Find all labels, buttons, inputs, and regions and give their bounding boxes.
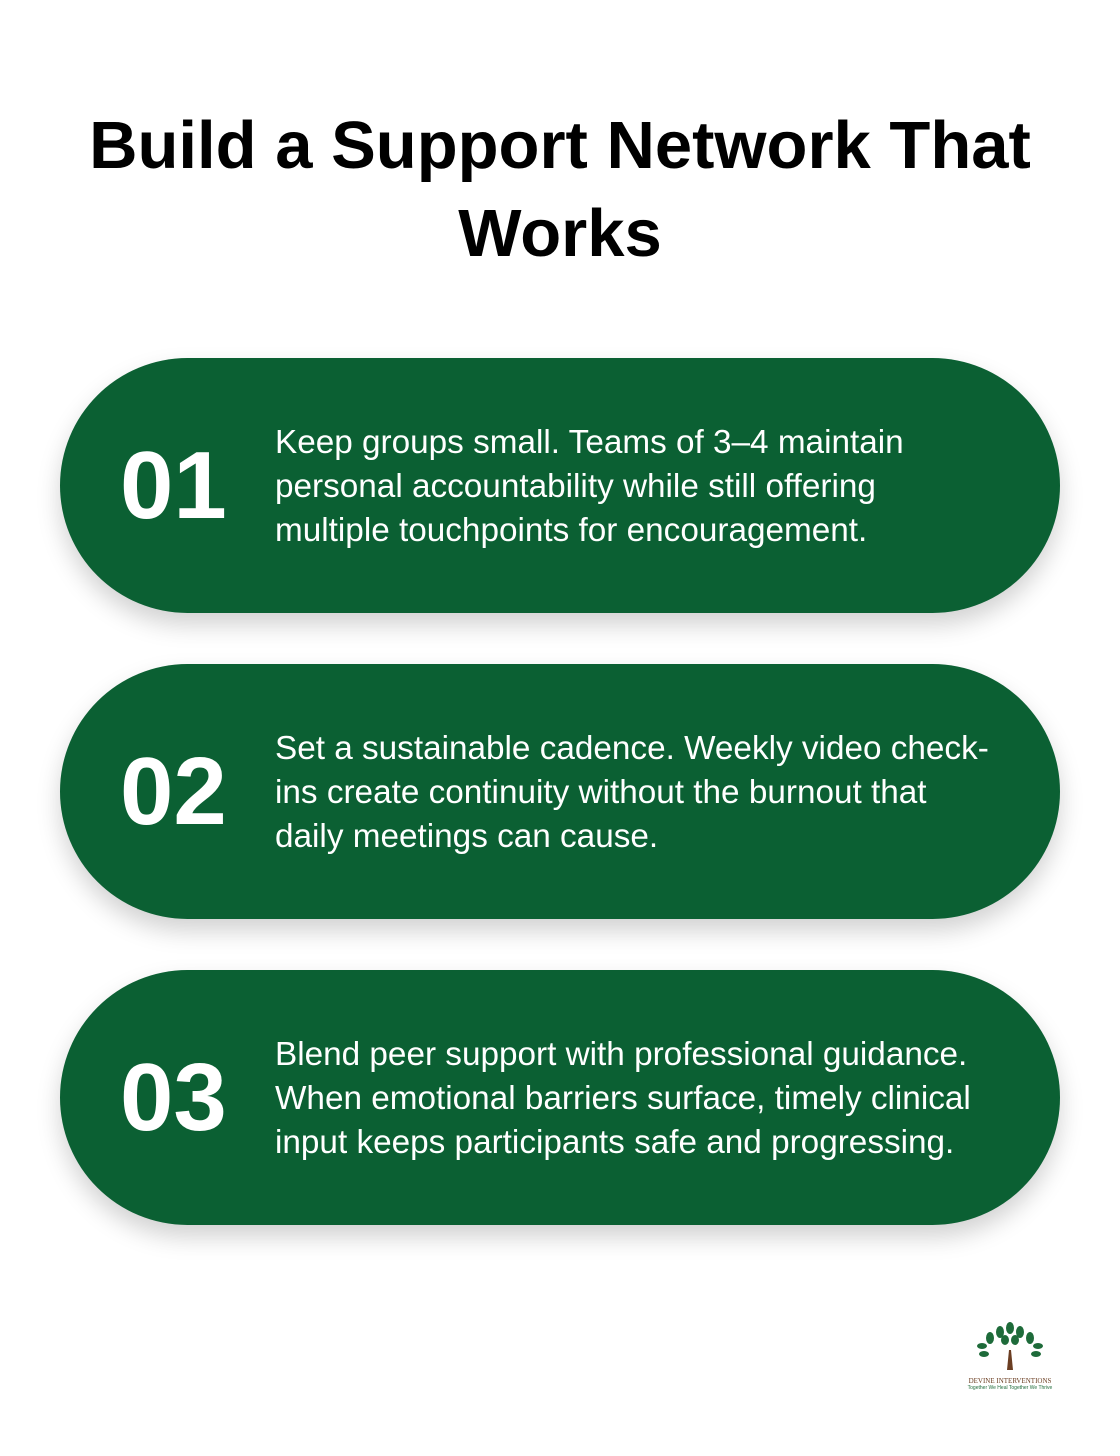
text 02: ins create continuity without the burnout that	[275, 774, 927, 811]
text 03: When emotional barriers surface, timely clinical	[275, 1080, 971, 1117]
text 01: Keep groups small. Teams of 3–4 maintain	[275, 424, 904, 461]
card 02	[60, 664, 1060, 919]
title: Works	[458, 196, 662, 271]
text 01: multiple touchpoints for encouragement.	[275, 512, 867, 549]
text 03	[275, 1036, 971, 1161]
text 02: daily meetings can cause.	[275, 818, 658, 855]
text 03: input keeps participants safe and progressing.	[275, 1124, 954, 1161]
text 03: Blend peer support with professional guidance.	[275, 1036, 967, 1073]
card 01	[60, 358, 1060, 613]
logo: DEVINE INTERVENTIONS	[969, 1377, 1051, 1385]
number 03: 03	[120, 1044, 227, 1151]
logo: Together We Heal Together We Thrive	[968, 1385, 1052, 1391]
number 02: 02	[120, 738, 227, 845]
card 03	[60, 970, 1060, 1225]
title	[89, 108, 1031, 271]
title: Build a Support Network That	[89, 108, 1031, 183]
text 02: Set a sustainable cadence. Weekly video check-	[275, 730, 989, 767]
logo	[968, 1322, 1052, 1391]
number 01: 01	[120, 432, 227, 539]
text 01	[275, 424, 904, 549]
text 02	[275, 730, 989, 855]
text 01: personal accountability while still offering	[275, 468, 876, 505]
